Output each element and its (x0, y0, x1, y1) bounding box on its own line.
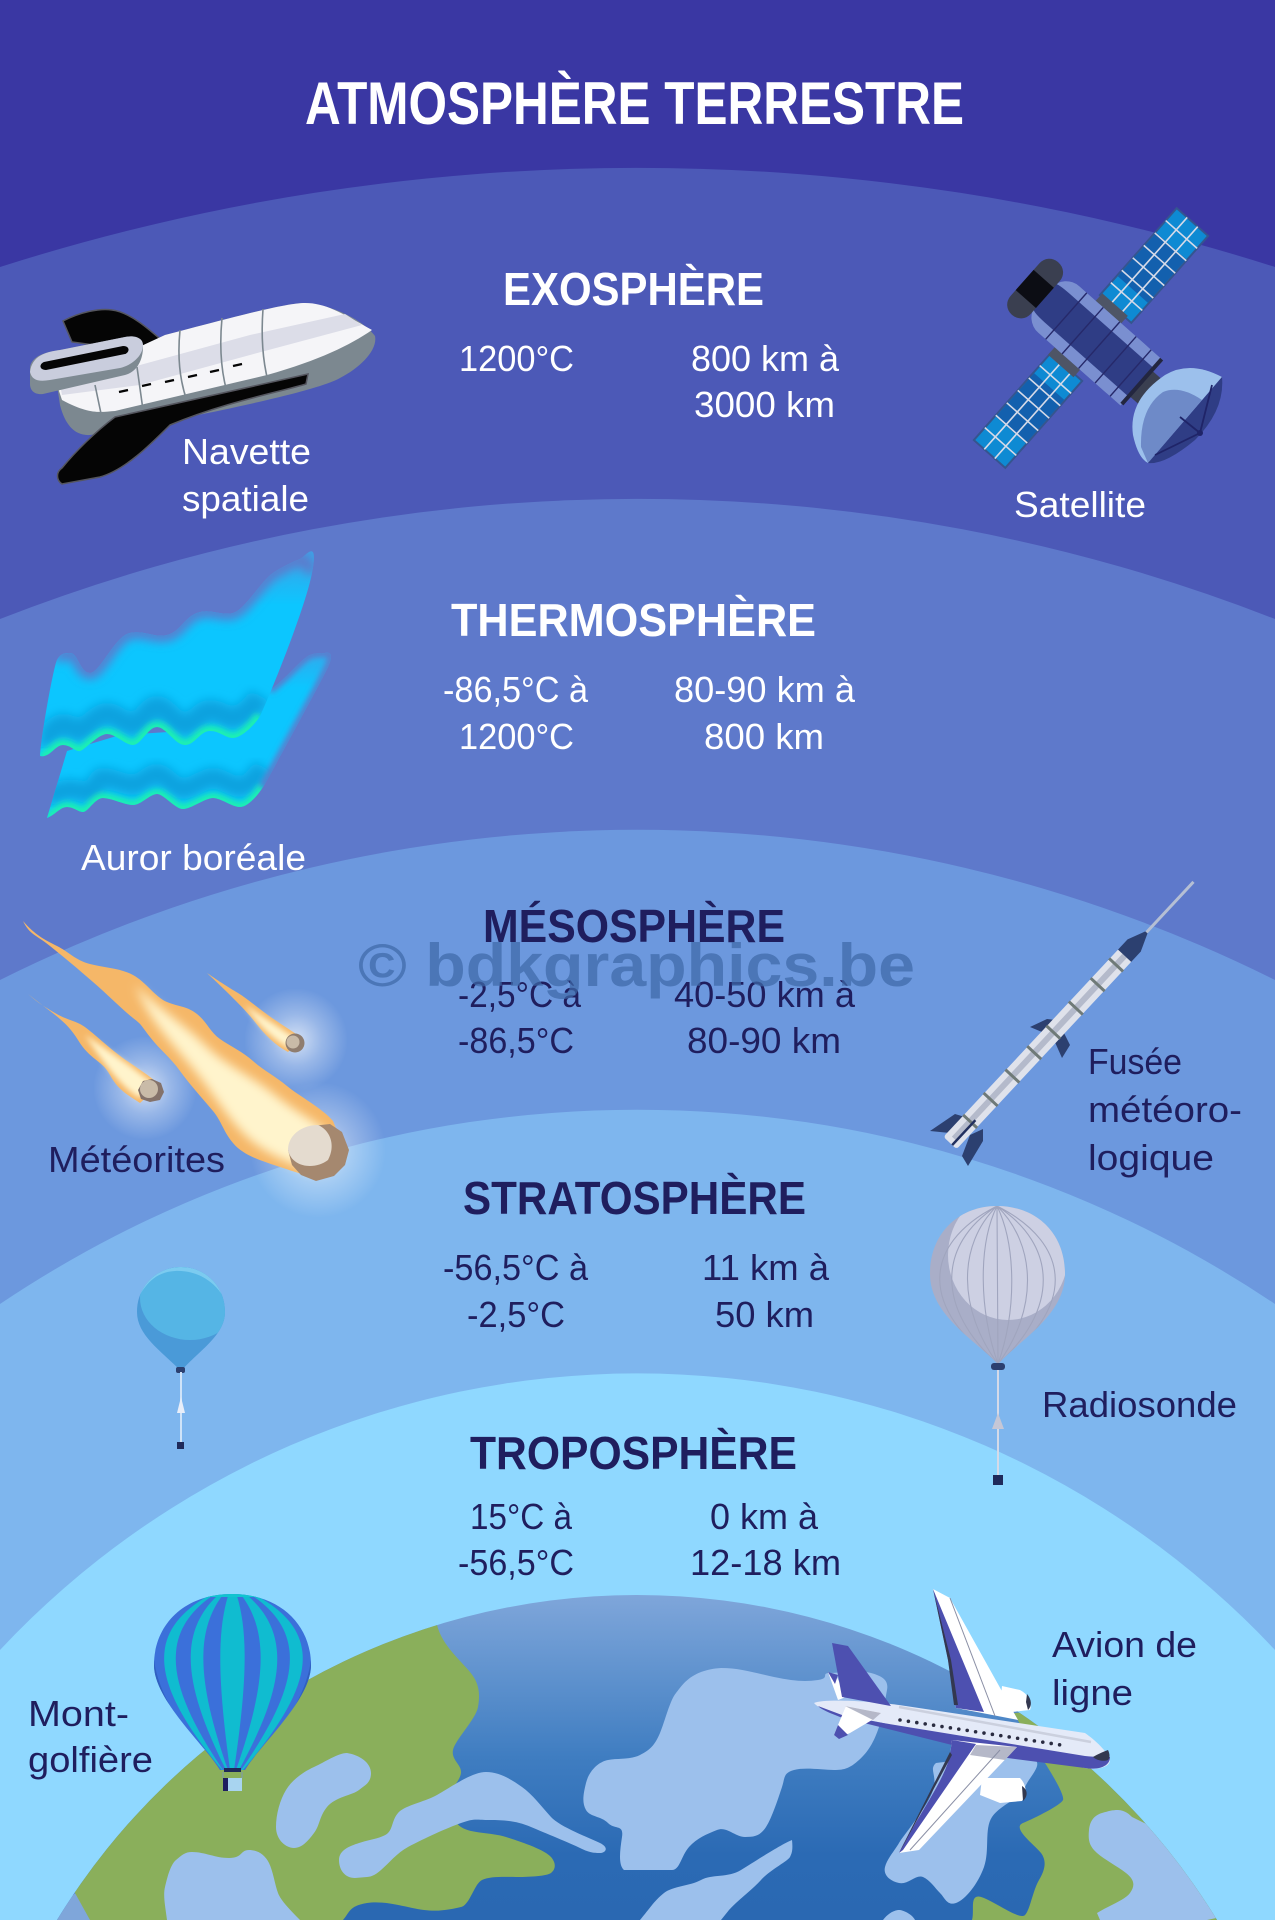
label: montgolfière (28, 1693, 153, 1780)
watermark: © bdkgraphics.be (358, 932, 915, 999)
temperature: thermosphère (443, 669, 589, 757)
temperature: mésosphère: -2,5°C à (458, 974, 582, 1015)
icon: weather rocket (930, 875, 1200, 1166)
icon: hot air balloon (150, 1590, 315, 1791)
label: auror boréale: Auror boréale (81, 837, 306, 878)
altitude: troposphère (690, 1496, 841, 1583)
altitude: exosphère: 3000 km (694, 384, 835, 425)
altitude: thermosphère: 80-90 km à (674, 669, 856, 710)
heading: thermosphère: THERMOSPHÈRE (451, 594, 816, 646)
label: fusée météorologique: météoro- (1088, 1089, 1242, 1130)
label: satellite: Satellite (1014, 484, 1146, 525)
altitude: exosphère (691, 338, 840, 425)
altitude: stratosphère (702, 1247, 830, 1335)
panel: exosphère (459, 263, 840, 425)
icon: meteorites (23, 921, 386, 1218)
altitude: troposphère: 12-18 km (690, 1542, 841, 1583)
label: navette spatiale: Navette (182, 431, 311, 472)
icon: radiosonde balloon (930, 1206, 1065, 1485)
heading: mésosphère: MÉSOSPHÈRE (483, 900, 785, 952)
icon: space shuttle (30, 303, 375, 484)
heading: exosphère: EXOSPHÈRE (503, 263, 764, 315)
label: montgolfière: Mont- (28, 1693, 129, 1734)
temperature: mésosphère: -86,5°C (458, 1020, 574, 1061)
label: avion de ligne: ligne (1052, 1672, 1133, 1713)
band: troposphère (0, 1373, 1275, 1920)
altitude: thermosphère: 800 km (704, 716, 824, 757)
label: navette spatiale: spatiale (182, 478, 309, 519)
label: fusée météorologique: Fusée (1088, 1041, 1182, 1082)
altitude: mésosphère (674, 974, 856, 1061)
icon: airliner (814, 1589, 1110, 1853)
label: avion de ligne (1052, 1624, 1197, 1713)
lower wing (899, 1740, 1017, 1853)
earth globe (57, 1595, 1217, 1920)
fuselage (814, 1701, 1110, 1769)
temperature: troposphère: -56,5°C (458, 1542, 574, 1583)
temperature: thermosphère: 1200°C (459, 716, 574, 757)
altitude: thermosphère (674, 669, 856, 757)
band: stratosphère (0, 1110, 1275, 1920)
icon: satellite (974, 208, 1222, 468)
temperature: stratosphère: -2,5°C (467, 1294, 565, 1335)
panel: thermosphère (443, 594, 856, 757)
rear stabiliser upper (828, 1672, 846, 1700)
band: mésosphère (0, 830, 1275, 1920)
temperature: stratosphère: -56,5°C à (443, 1247, 589, 1288)
panel: mésosphère (458, 900, 856, 1061)
label: fusée météorologique (1088, 1041, 1242, 1178)
altitude: stratosphère: 50 km (715, 1294, 814, 1335)
temperature: troposphère: 15°C à (470, 1496, 573, 1537)
icon: small balloon (137, 1267, 225, 1449)
altitude: mésosphère: 40-50 km à (674, 974, 856, 1015)
label: météorites: Météorites (48, 1139, 225, 1180)
lower stabiliser (834, 1706, 881, 1738)
altitude: stratosphère: 11 km à (702, 1247, 830, 1288)
heading: stratosphère: STRATOSPHÈRE (463, 1172, 806, 1224)
label: navette spatiale (182, 431, 311, 519)
panel: troposphère (458, 1427, 841, 1583)
altitude: exosphère: 800 km à (691, 338, 840, 379)
altitude: troposphère: 0 km à (710, 1496, 819, 1537)
label: radiosonde: Radiosonde (1042, 1384, 1237, 1425)
lower engine (980, 1778, 1026, 1803)
temperature: exosphère: 1200°C (459, 338, 574, 379)
band: thermosphère (0, 499, 1275, 1920)
label: fusée météorologique: logique (1088, 1137, 1214, 1178)
temperature: stratosphère (443, 1247, 589, 1335)
altitude: mésosphère: 80-90 km (687, 1020, 841, 1061)
panel: stratosphère (443, 1172, 830, 1335)
upper engine (1000, 1686, 1031, 1712)
tail fin (832, 1643, 891, 1706)
temperature: troposphère (458, 1496, 574, 1583)
label: avion de ligne: Avion de (1052, 1624, 1197, 1665)
label: montgolfière: golfière (28, 1739, 153, 1780)
temperature: mésosphère (458, 974, 582, 1061)
title: ATMOSPHÈRE TERRESTRE (305, 70, 964, 137)
heading: troposphère: TROPOSPHÈRE (470, 1427, 797, 1479)
temperature: thermosphère: -86,5°C à (443, 669, 589, 710)
icon: aurora borealis (40, 551, 331, 818)
